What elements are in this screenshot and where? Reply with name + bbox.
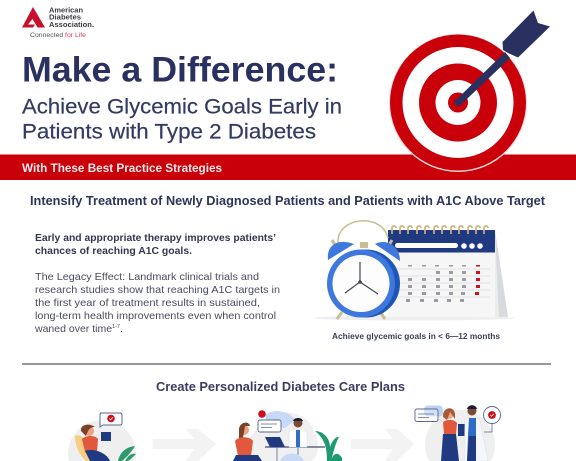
title: Make a Difference: [22, 50, 338, 90]
message bubble [415, 406, 443, 422]
plant [118, 446, 136, 461]
section heading: personalized care plans: Create Personalized Diabetes Care Plans [156, 379, 405, 394]
logo: American Diabetes Association [22, 6, 94, 39]
subtitle: Patients with Type 2 Diabetes [22, 120, 316, 144]
calendar highlighted dates [475, 265, 480, 295]
doctor [280, 418, 307, 461]
legacy effect text: the first year of treatment results in sustained, [35, 297, 260, 309]
patient [441, 408, 459, 461]
check badge [484, 406, 500, 432]
key message text: Early and appropriate therapy improves patients’ [35, 232, 276, 244]
illustration: calendar and alarm clock [314, 221, 514, 320]
subtitle [22, 96, 342, 144]
dart [454, 10, 550, 106]
legacy effect text: The Legacy Effect: Landmark clinical trials and [35, 271, 259, 283]
banner text: With These Best Practice Strategies [22, 163, 222, 175]
key message text [35, 232, 276, 257]
plant [315, 431, 342, 461]
logo wordmark [49, 6, 94, 29]
tablet [101, 432, 111, 441]
icon: logo triangle [22, 7, 45, 28]
key message text: chances of reaching A1C goals. [35, 245, 192, 257]
legacy effect text: long-term health improvements even when control [35, 310, 276, 322]
target rings [389, 34, 527, 172]
logo wordmark: Association. [49, 20, 94, 29]
chair [75, 435, 100, 461]
calendar grid lines [395, 269, 490, 297]
legacy effect text: 1-7 [112, 324, 120, 330]
patient [233, 423, 262, 461]
logo wordmark: American [49, 6, 83, 15]
illustration: patient with tablet [68, 413, 136, 461]
icon: target with dart [389, 10, 550, 172]
caption: glycemic goal timeframe: Achieve glycemic goals in < 6—12 months [332, 331, 500, 341]
red banner [0, 154, 576, 180]
clipboard [458, 424, 469, 436]
message bubble [258, 410, 281, 432]
illustration: patient and doctor shaking hands [415, 405, 500, 461]
doctor [464, 405, 488, 461]
logo wordmark: Diabetes [49, 13, 81, 22]
subtitle: Achieve Glycemic Goals Early in [22, 96, 342, 118]
calendar rings [392, 226, 488, 234]
ground shadow [314, 316, 514, 320]
legacy effect text: . [120, 323, 123, 335]
legacy effect text: waned over time [35, 323, 112, 335]
legacy effect text: research studies show that reaching A1C targets in [35, 284, 280, 296]
arrow: step two to three [350, 429, 414, 461]
desk and laptop [265, 437, 325, 461]
arrow: step one to two [152, 429, 216, 461]
alarm clock [327, 221, 400, 319]
logo tagline: Connected for Life [30, 32, 86, 39]
section heading: intensify treatment: Intensify Treatment of Newly Diagnosed Patients and Patients with A1C Above Target [30, 193, 546, 208]
calendar date cells [406, 265, 466, 302]
speech bubble with check [100, 413, 122, 427]
legacy effect text [34, 271, 280, 335]
calendar [388, 226, 508, 317]
illustration: patient and doctor consultation [233, 410, 342, 461]
patient [81, 425, 110, 461]
